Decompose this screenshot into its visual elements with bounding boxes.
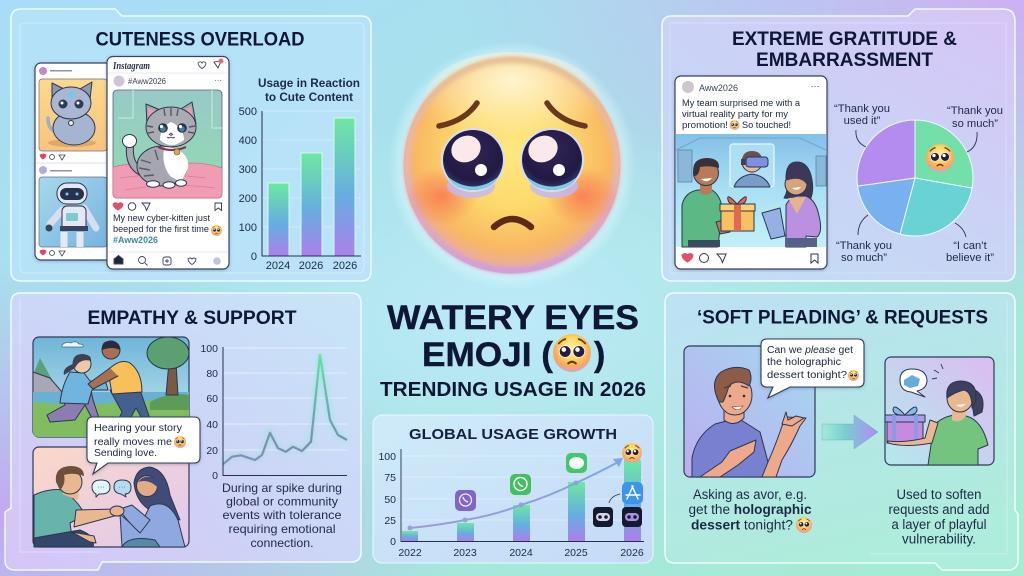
illustration: holding hands	[33, 447, 189, 547]
kneeling woman	[47, 354, 108, 430]
instagram wordmark: Instagram	[112, 61, 150, 72]
title: extreme gratitude: EXTREME GRATITUDE &	[732, 28, 957, 50]
chart caption: requiring emotional	[228, 522, 336, 536]
bar chart: usage in reaction: 2026	[333, 260, 357, 272]
post caption: My new cyber-kitten just	[113, 213, 211, 223]
speech bubble: the holographic	[767, 357, 841, 368]
vr hologram window	[730, 144, 774, 187]
pie labels: “Thank you	[834, 103, 890, 115]
axis labels: 0	[390, 536, 396, 548]
small chat bubbles	[92, 480, 131, 497]
main pleading emoji	[388, 41, 636, 289]
post header: #Aww2026	[128, 77, 167, 86]
line chart: 100	[200, 343, 218, 355]
cyber cat image	[39, 79, 107, 151]
pie labels: so much”	[841, 252, 887, 264]
line chart: 80	[206, 368, 218, 380]
speech bubble: Hearing your story	[94, 423, 182, 434]
line chart: 60	[206, 393, 218, 405]
illustration: helping outdoors	[33, 337, 189, 437]
post text: My team surprised me with a	[682, 98, 800, 108]
blush cheeks	[406, 166, 618, 226]
pie labels: so much”	[952, 118, 998, 130]
bar chart: usage in reaction: 0	[251, 251, 257, 263]
axis labels: 25	[384, 515, 396, 527]
illustration: woman with gift	[885, 357, 994, 465]
icon: vr mask right	[622, 507, 642, 527]
chart title: GLOBAL USAGE GROWTH	[409, 426, 617, 443]
arrow	[822, 415, 878, 449]
icon: title emoji	[553, 334, 591, 372]
pie labels: “Thank you	[947, 105, 1003, 117]
avatar and name	[682, 81, 820, 93]
left eye	[441, 128, 505, 198]
kitten illustration	[113, 90, 222, 198]
bottom navigation icons	[114, 256, 221, 266]
man with gift	[682, 158, 730, 247]
woman	[928, 381, 988, 465]
axis labels: 2024	[509, 547, 533, 559]
post action icons	[113, 203, 222, 210]
pie chart	[834, 103, 1003, 264]
left caption: get the holographic	[688, 502, 811, 517]
icon: messages	[566, 453, 587, 473]
axis labels: 75	[384, 472, 396, 484]
icon: whatsapp	[510, 474, 531, 495]
chart caption: During ar spike during	[222, 481, 342, 495]
left arm and hand on chest	[700, 440, 756, 477]
thought bubble	[900, 369, 927, 397]
chart title: Usage in Reaction	[258, 78, 360, 90]
helping man	[88, 341, 155, 433]
panel: extreme gratitude and embarrassment	[662, 9, 1015, 281]
small chat bubbles: ···	[118, 484, 126, 491]
bars	[402, 460, 641, 541]
woman sitting	[110, 467, 185, 547]
avatar and name line	[39, 166, 72, 174]
post text: So touched!	[742, 120, 791, 130]
panel: global usage growth	[373, 415, 653, 563]
speech bubble	[761, 339, 864, 398]
post icons	[40, 154, 65, 160]
speech bubble: really moves me	[94, 437, 172, 448]
panel: cuteness overload	[11, 9, 371, 281]
woman with notepad	[762, 162, 821, 247]
right caption: requests and add	[888, 502, 990, 517]
axis labels	[378, 451, 644, 559]
mouth	[494, 219, 531, 227]
pie labels: “Thank you	[836, 240, 892, 252]
main title: WATERY EYES	[387, 299, 639, 337]
right caption: vulnerability.	[902, 532, 976, 546]
main title	[380, 299, 646, 401]
bar chart: usage in reaction: 2026	[299, 260, 323, 272]
post header: ···	[214, 76, 222, 85]
left caption: Asking as avor, e.g.	[693, 487, 807, 502]
post text: virtual reality party for my	[682, 109, 789, 119]
icon: small emoji	[796, 517, 812, 533]
post text: promotion!	[682, 120, 728, 130]
axis labels: 2023	[453, 547, 477, 559]
avatar and name: ···	[810, 81, 820, 91]
bar chart: usage in reaction: 300	[239, 164, 257, 176]
arms	[888, 420, 938, 446]
illustration: man pleading	[684, 346, 815, 477]
title: cuteness overload: CUTENESS OVERLOAD	[96, 28, 304, 50]
header icons	[198, 58, 224, 68]
post caption: #Aww2026	[113, 235, 158, 245]
bar chart: usage in reaction: 500	[239, 106, 257, 118]
robot image	[39, 177, 107, 247]
post text	[682, 98, 800, 130]
man sitting	[34, 466, 118, 547]
pie labels	[834, 103, 1003, 264]
icon: vr mask left	[593, 507, 613, 527]
axis labels: 2025	[564, 547, 588, 559]
speech bubble: Can we please get	[767, 345, 853, 356]
main instagram phone	[107, 56, 229, 269]
growth line	[408, 458, 623, 530]
bar chart: usage in reaction	[239, 78, 361, 272]
right arm and open hand	[762, 412, 806, 477]
post icons	[40, 250, 65, 256]
speech bubble	[87, 417, 200, 474]
small chat bubbles: ···	[98, 484, 104, 491]
line chart: 20	[206, 445, 218, 457]
gift box	[885, 407, 925, 443]
title: soft pleading: ‘SOFT PLEADING’ & REQUESTS	[697, 308, 988, 328]
panel: empathy and support	[5, 293, 361, 570]
party illustration	[676, 134, 826, 247]
bar chart: usage in reaction: 100	[239, 222, 257, 234]
chart title: to Cute Content	[265, 92, 353, 104]
avatar and name line	[39, 67, 72, 75]
chart caption: connection.	[250, 536, 314, 550]
icon: emoji on top bar	[622, 443, 642, 463]
pie labels: believe it”	[946, 252, 994, 264]
title: empathy and support: EMPATHY & SUPPORT	[88, 307, 297, 329]
bar chart: usage in reaction: 2024	[266, 260, 290, 272]
pie labels: used it”	[844, 115, 881, 127]
speech bubble: dessert tonight?	[767, 370, 848, 381]
title: extreme gratitude: EMBARRASSMENT	[756, 49, 933, 71]
social post card	[675, 76, 827, 269]
left caption: dessert tonight?	[691, 518, 792, 532]
post action icons	[682, 254, 818, 263]
post header	[114, 76, 222, 86]
axis labels: 50	[384, 494, 396, 506]
leader lines	[856, 130, 977, 237]
gift box	[720, 197, 755, 231]
subtitle: TRENDING USAGE IN 2026	[380, 378, 646, 401]
icon: viber	[455, 490, 476, 511]
pie labels: “I can’t	[953, 240, 988, 252]
right caption: Used to soften	[896, 487, 982, 502]
back phone feed	[35, 63, 115, 260]
chart caption: events with tolerance	[222, 508, 342, 522]
main title: EMOJI (	[422, 336, 554, 374]
icon: pleading emoji	[926, 144, 954, 172]
sparks	[932, 364, 943, 379]
avatar and name: Aww2026	[699, 83, 738, 93]
right caption: a layer of playful	[892, 517, 986, 532]
chart caption: global or community	[226, 494, 338, 508]
post caption: beeped for the first time	[113, 224, 209, 234]
axis labels: 100	[378, 451, 396, 463]
line chart	[200, 343, 347, 482]
line chart: 0	[212, 470, 218, 482]
bar chart: usage in reaction: 200	[239, 193, 257, 205]
bar chart: usage in reaction: 400	[239, 135, 257, 147]
icon: app store	[622, 482, 643, 504]
panel: soft pleading and requests	[665, 293, 1018, 570]
speech bubble: Sending love.	[94, 448, 157, 459]
main title: )	[594, 336, 605, 374]
post caption	[113, 213, 222, 245]
axis labels: 2026	[620, 547, 644, 559]
eyebrows	[439, 103, 585, 126]
right eye	[520, 128, 584, 198]
line chart: 40	[206, 419, 218, 431]
axis labels: 2022	[398, 547, 422, 559]
